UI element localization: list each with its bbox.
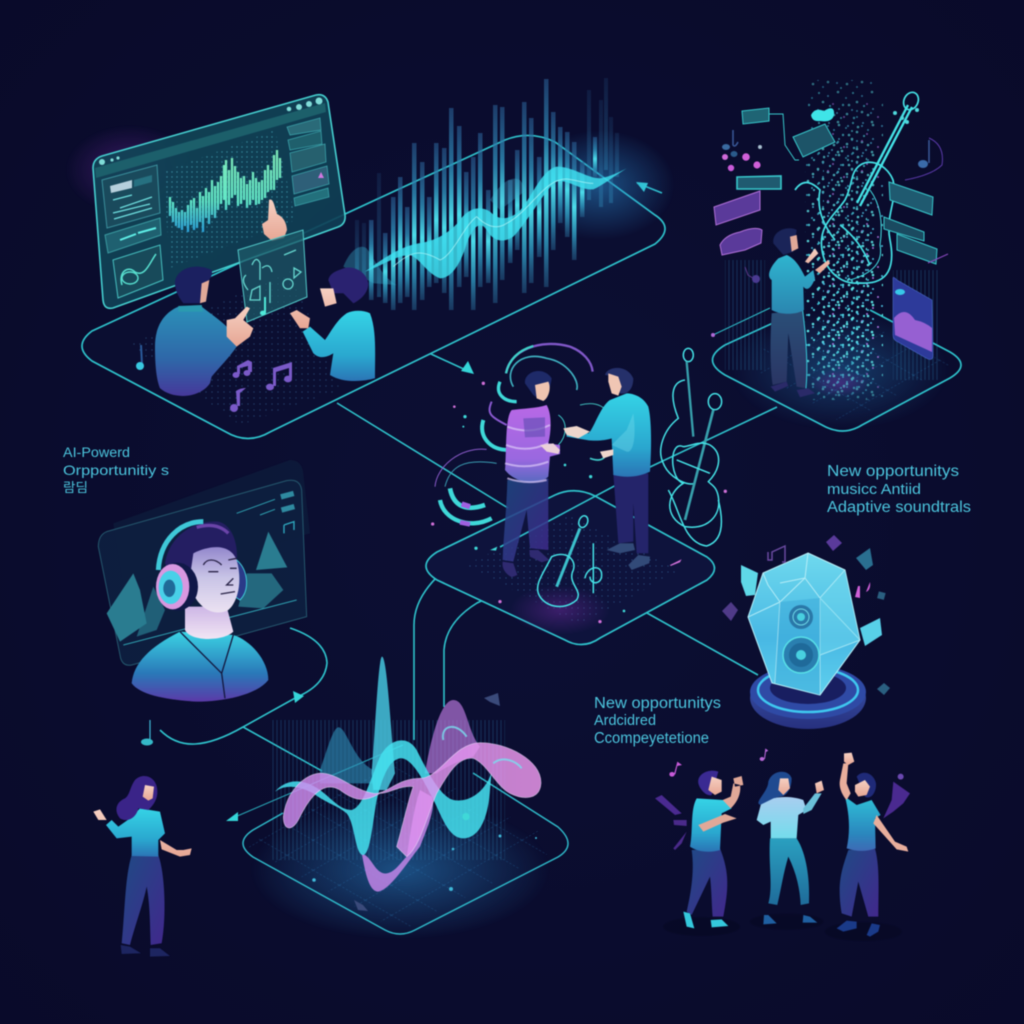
earphone cord <box>180 632 233 698</box>
crystal shards <box>722 535 890 695</box>
falling particle column <box>805 80 883 408</box>
text: adaptive soundtracks: Adaptive soundtrals <box>827 499 971 516</box>
handshake hands <box>563 426 613 458</box>
person: dissolving man in purple <box>502 371 560 577</box>
back screens <box>113 460 310 583</box>
hair highlight <box>197 525 228 533</box>
note on screen <box>284 522 294 533</box>
scene triangles <box>107 532 287 642</box>
text: competition: Ccompeyetetione <box>594 730 709 747</box>
pink floating cards <box>714 191 762 255</box>
icon: crystal speaker <box>722 535 890 729</box>
dashboard title bar <box>95 103 326 178</box>
panel: bottom wave platform <box>243 720 568 940</box>
back ear cup <box>235 560 247 600</box>
icon: pointing hand on screen <box>262 200 287 241</box>
note above woman <box>149 720 151 741</box>
woman hands <box>290 288 337 328</box>
icon: holographic guitar <box>795 90 921 283</box>
speaker cones <box>783 605 819 673</box>
panel: top-right platform <box>712 310 961 431</box>
panel: glowing waveform ribbon <box>343 167 627 285</box>
icon: data swirl bottom <box>435 449 497 524</box>
right side controls <box>287 118 329 206</box>
listener screen lines <box>123 499 297 645</box>
text: AI-powered opportunities: AI-Powerd <box>63 444 130 460</box>
icon: small teal note <box>141 738 153 746</box>
data tablet panel <box>893 277 933 359</box>
headband <box>158 522 203 570</box>
text: competition: New opportunitys <box>594 695 721 712</box>
person: man at dashboard <box>155 267 253 396</box>
panel: AI music dashboard screen <box>65 95 345 308</box>
tablet with music symbols <box>238 230 307 322</box>
center scene drawn in zoom coordinates <box>431 344 727 623</box>
connector lines and arrows <box>160 183 770 820</box>
man pointing hand <box>227 307 253 347</box>
dancers group <box>655 748 910 941</box>
crystal body <box>748 553 860 695</box>
bust <box>132 632 268 702</box>
person: dancer three <box>837 753 908 937</box>
window buttons <box>99 98 322 165</box>
icon: headphone cup <box>156 563 198 611</box>
text: competition: Ardcidred <box>594 713 656 729</box>
icons: music notes on platform <box>136 345 292 412</box>
floor shadows <box>663 914 902 941</box>
music note on tablet <box>264 297 266 313</box>
person: man in cyan shirt <box>563 368 651 570</box>
person: woman at dashboard <box>290 267 375 381</box>
vinyl thumbnail panel <box>113 245 163 298</box>
speaker base <box>750 665 866 729</box>
spectrum glow <box>525 130 675 240</box>
text: adaptive soundtracks <box>827 463 971 516</box>
panel: audio spectrum bars <box>355 78 619 310</box>
wave particles <box>312 693 537 911</box>
through-line in front of platform <box>500 407 777 547</box>
dissolving man hand <box>540 443 560 454</box>
neck <box>185 607 233 639</box>
data columns behind guitar <box>725 260 938 380</box>
panel: central platform <box>426 491 714 645</box>
icon: guitar outlines right <box>661 348 722 546</box>
person: dancer one <box>683 771 743 928</box>
text: AI-powered opportunities <box>63 444 169 495</box>
person: dancer two <box>757 772 824 924</box>
text: adaptive soundtracks: New opportunitys <box>827 463 959 480</box>
cyan blob icon <box>811 108 834 121</box>
dashboard chart dots <box>163 130 296 268</box>
dashboard frame <box>93 95 345 308</box>
hair <box>165 522 237 583</box>
text: AI-powered opportunities: 람딤 <box>63 480 88 495</box>
icon: small guitar on platform <box>538 515 602 607</box>
screen controls <box>280 491 295 513</box>
text: adaptive soundtracks: musicc Antiid <box>827 481 921 498</box>
icons: dancer notes <box>655 748 910 850</box>
floating UI cards <box>737 108 937 264</box>
person: woman standing left <box>93 776 192 957</box>
pink symbol in controls <box>318 172 324 178</box>
panel: listener with headphones <box>98 460 310 702</box>
person: man with hologram <box>769 228 830 397</box>
hologram man hands <box>805 248 830 273</box>
text: AI-powered opportunities: Orpportunitiy s <box>63 462 169 478</box>
slider panel <box>105 218 161 253</box>
panel: top-left platform <box>82 135 665 439</box>
main listener screen <box>98 480 307 665</box>
icons: music notes and dots <box>722 130 948 283</box>
arrowheads <box>226 182 715 821</box>
scattered particles center <box>431 382 727 623</box>
face <box>189 542 239 613</box>
waveform in screen <box>170 150 280 232</box>
icon: data swirl top <box>482 344 608 460</box>
facial features <box>203 558 237 594</box>
chart: 3D wave ribbons <box>275 657 541 892</box>
left controls panel <box>102 165 160 228</box>
text: competition <box>594 695 721 747</box>
